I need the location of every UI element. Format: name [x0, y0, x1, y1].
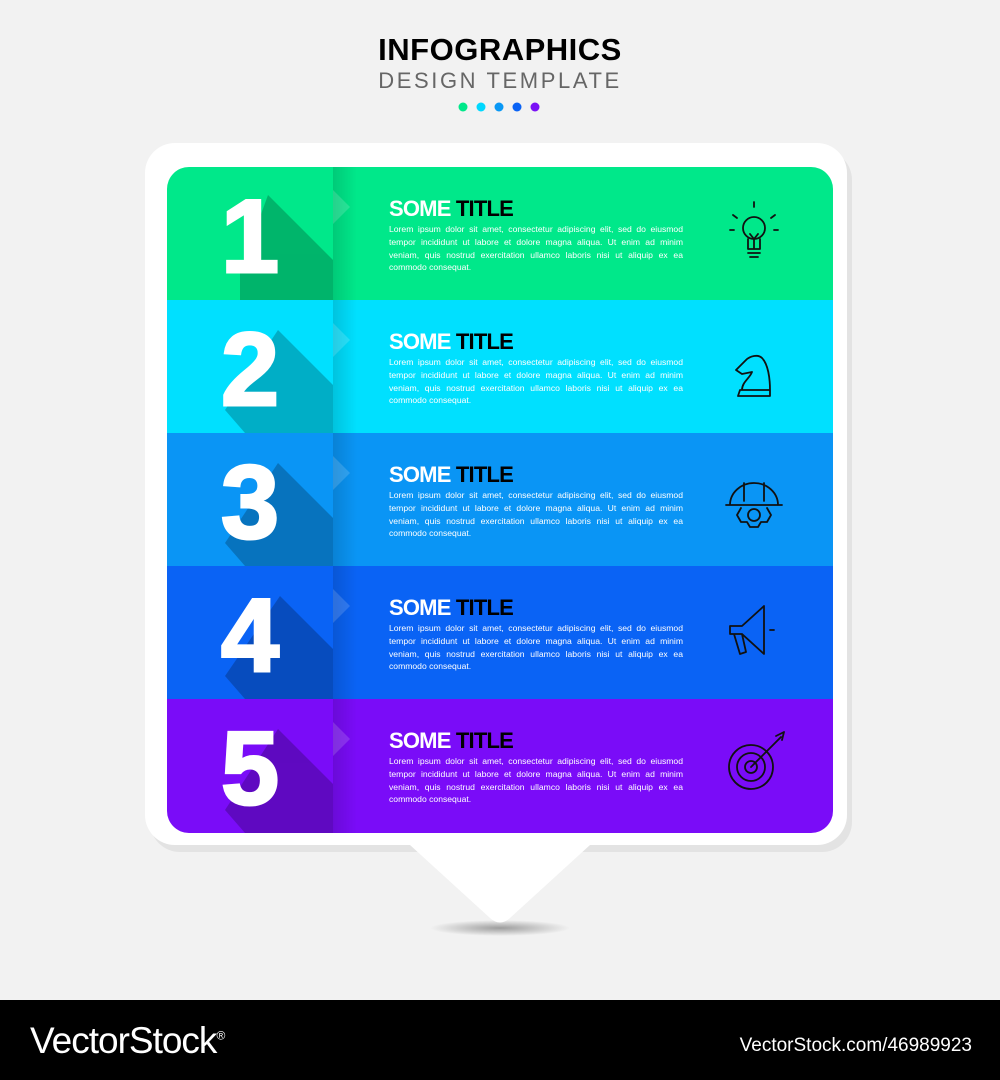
icons	[726, 202, 784, 789]
numbers: 5	[221, 711, 279, 827]
text: Lorem ipsum dolor sit amet, consectetur adipiscing elit, sed do eiusmod tempor incididunt ut labore et dolore magna aliqua. Ut enim ad minim veniam, quis nostrud exercitation ullamco laboris nisi ut aliquip ex ea commodo consequat.	[389, 490, 683, 538]
row texts: SOME TITLE	[389, 196, 513, 221]
title: INFOGRAPHICS	[378, 32, 622, 67]
numbers	[221, 179, 279, 827]
numbers: 1	[221, 179, 279, 295]
text: SOME TITLE	[389, 728, 513, 753]
numbers: 2	[221, 312, 279, 428]
title	[378, 32, 622, 93]
text: SOME TITLE	[389, 329, 513, 354]
text: SOME TITLE	[389, 462, 513, 487]
dots	[458, 102, 540, 112]
footer	[0, 1000, 1000, 1080]
title: DESIGN TEMPLATE	[378, 68, 622, 93]
text: SOME TITLE	[389, 595, 513, 620]
row texts	[389, 196, 684, 272]
footer: VectorStock®	[30, 1020, 224, 1061]
footer: VectorStock.com/46989923	[740, 1035, 972, 1056]
row texts: Lorem ipsum dolor sit amet, consectetur adipiscing elit, sed do eiusmod tempor incididunt ut labore et dolore magna aliqua. Ut enim ad minim veniam, quis nostrud exercitation ullamco laboris nisi ut aliquip ex ea commodo consequat.	[389, 224, 683, 272]
text: Lorem ipsum dolor sit amet, consectetur adipiscing elit, sed do eiusmod tempor incididunt ut labore et dolore magna aliqua. Ut enim ad minim veniam, quis nostrud exercitation ullamco laboris nisi ut aliquip ex ea commodo consequat.	[389, 623, 683, 671]
text: Lorem ipsum dolor sit amet, consectetur adipiscing elit, sed do eiusmod tempor incididunt ut labore et dolore magna aliqua. Ut enim ad minim veniam, quis nostrud exercitation ullamco laboris nisi ut aliquip ex ea commodo consequat.	[389, 357, 683, 405]
card	[145, 143, 852, 935]
numbers: 4	[221, 578, 279, 694]
text: Lorem ipsum dolor sit amet, consectetur adipiscing elit, sed do eiusmod tempor incididunt ut labore et dolore magna aliqua. Ut enim ad minim veniam, quis nostrud exercitation ullamco laboris nisi ut aliquip ex ea commodo consequat.	[389, 756, 683, 804]
numbers: 3	[221, 445, 279, 561]
